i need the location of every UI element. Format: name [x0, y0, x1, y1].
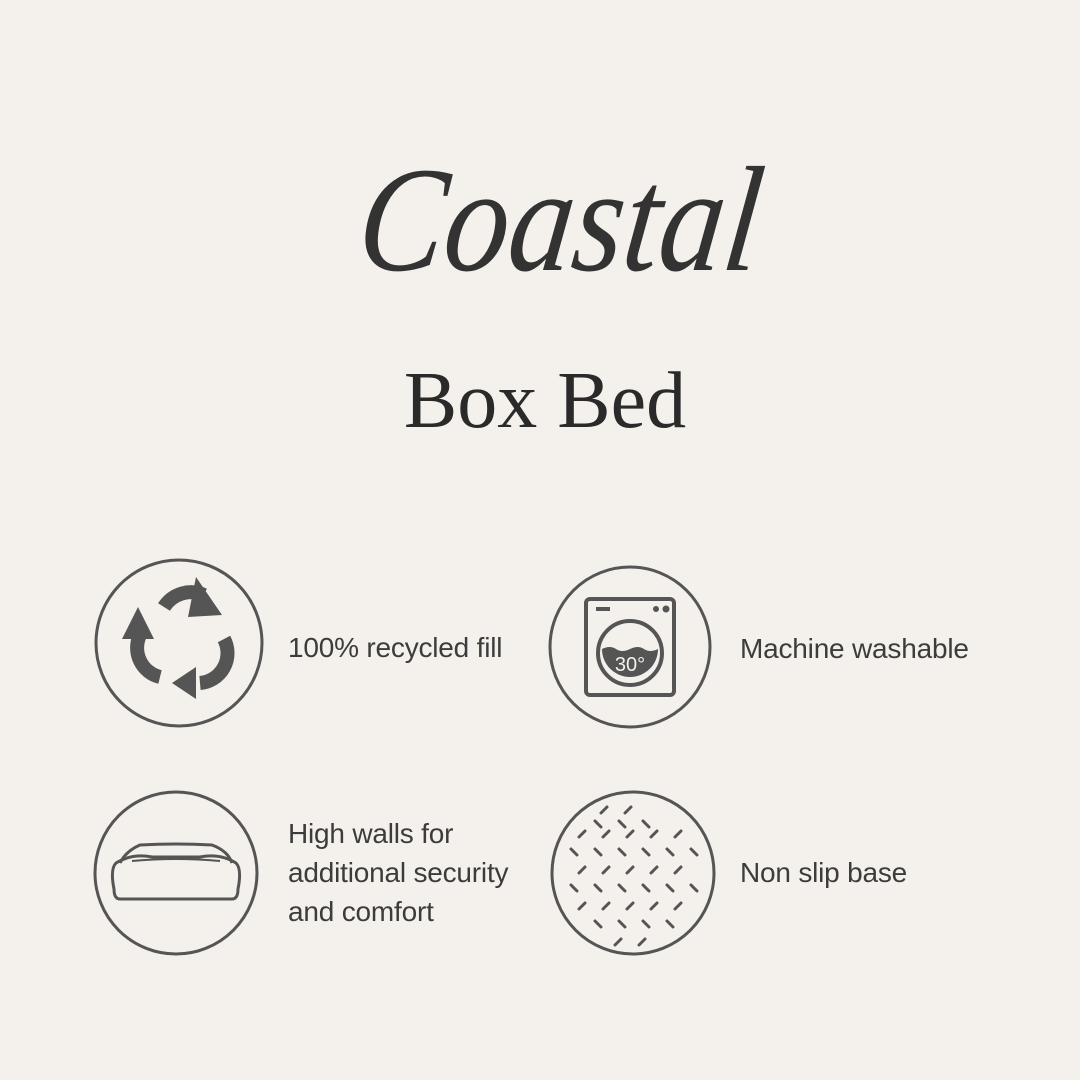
text: high walls: additional security [288, 857, 508, 888]
icon: washing machine: 30° [615, 654, 645, 676]
subtitle: Box Bed: Box Bed [404, 357, 686, 445]
title: Coastal script: Coastal [350, 137, 772, 303]
text: recycled fill: 100% recycled fill [288, 632, 502, 663]
text: high walls: High walls for [288, 818, 453, 849]
text: machine washable: Machine washable [740, 633, 969, 664]
text: high walls [288, 818, 508, 927]
icon: washing machine [548, 566, 712, 728]
text: non slip base: Non slip base [740, 857, 907, 888]
icon: box bed [94, 790, 258, 956]
icon: recycle [94, 558, 264, 728]
icon: non slip pattern [550, 790, 716, 956]
text: high walls: and comfort [288, 896, 434, 927]
